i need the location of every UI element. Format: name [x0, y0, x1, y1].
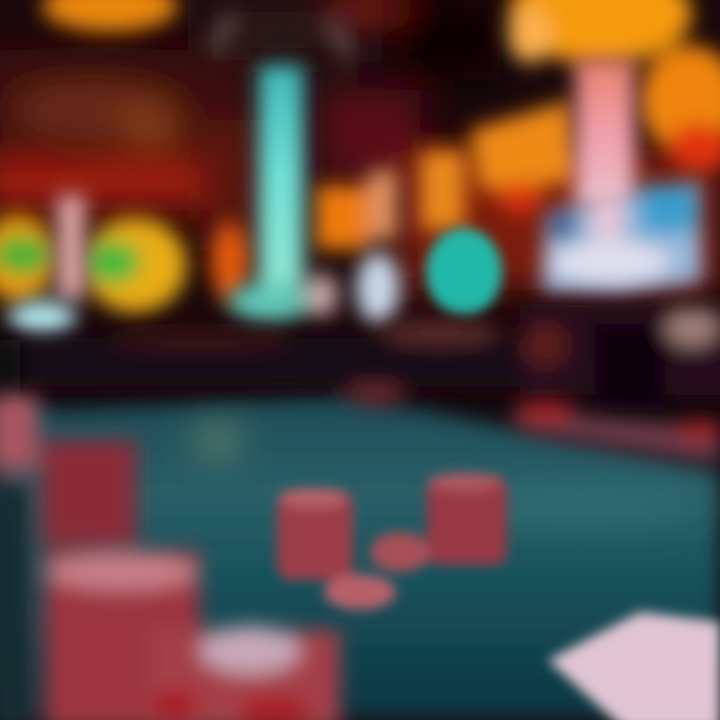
- rail: red and mauve table edge: [510, 400, 720, 465]
- chips: foreground stacks left: [0, 395, 340, 720]
- background: red glow wall: [0, 0, 720, 290]
- pillar: pale arches at top: [212, 15, 350, 60]
- left edge: dark foreground: [0, 340, 20, 400]
- light: white glow: [356, 252, 400, 324]
- pillar: turquoise light column: [228, 65, 338, 322]
- light: pale blue left glow: [8, 300, 76, 336]
- background: teal table: [0, 395, 720, 720]
- background: dark upper room: [0, 0, 720, 400]
- screen: blue-white display: [542, 180, 702, 295]
- pillar: pale pink left column: [57, 195, 85, 300]
- table: highlights: [192, 424, 710, 525]
- light: teal circle: [426, 228, 502, 316]
- lights: left yellow and green signs: [0, 214, 187, 313]
- chips: middle stacks: [277, 473, 507, 610]
- band: dark crowd and tables: [0, 305, 720, 410]
- card: white playing card: [548, 612, 720, 720]
- lights: orange lamps: [42, 0, 720, 302]
- pillar: pink light column: [575, 58, 635, 208]
